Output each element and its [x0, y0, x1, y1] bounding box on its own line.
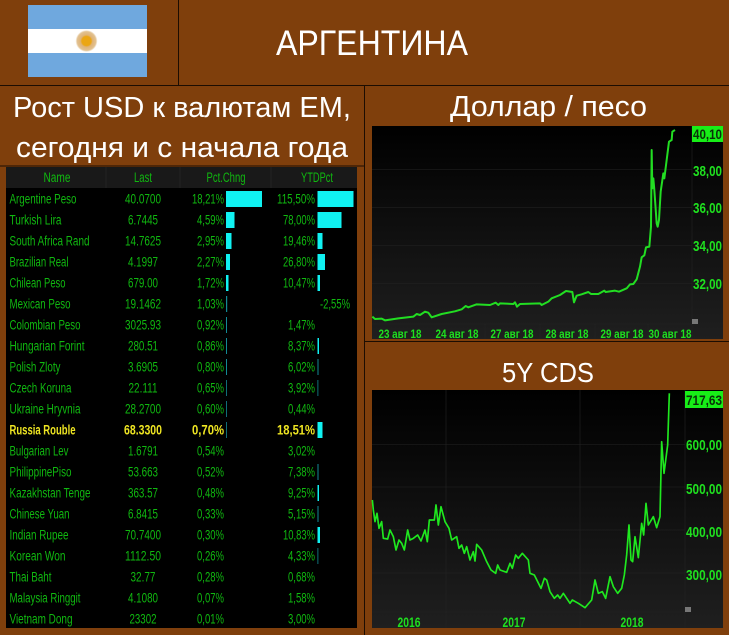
- heading: 5Y CDS: 5Y CDS: [502, 357, 594, 388]
- column: Name: Argentine Peso: [10, 192, 76, 206]
- heading: EM currencies: [13, 92, 351, 164]
- column: Name: Chilean Peso: [10, 276, 66, 290]
- chart: dollar / peso line chart: [372, 126, 723, 341]
- column: Name: Russia Rouble: [10, 422, 76, 438]
- column: Last: 4.1997: [128, 254, 158, 270]
- heading: dollar / peso: Доллар / песо: [450, 91, 647, 123]
- column: YTDPct values: 18,51%: [277, 422, 315, 438]
- column: YTDPct values: 115,50%: [277, 192, 315, 206]
- price tag: 40,10: 40,10: [693, 126, 722, 142]
- column: Pct.Chng values: 0,70%: [192, 422, 224, 438]
- column: YTDPct values: 78,00%: [283, 212, 315, 228]
- chart: 5Y CDS line chart: [372, 390, 723, 630]
- column: YTDPct values: 3,02%: [288, 444, 315, 458]
- heading: EM currencies: Рост USD к валютам EM,: [13, 92, 351, 124]
- column: YTDPct values: 10,47%: [283, 276, 315, 290]
- table header: Pct.Chng: [206, 170, 246, 185]
- axis: year labels: 2016: [398, 615, 421, 630]
- axis: price labels: [693, 163, 722, 293]
- column: Last: 28.2700: [125, 402, 161, 416]
- axis: year labels: 2017: [502, 615, 526, 630]
- column: Last: 3025.93: [125, 318, 161, 332]
- column: Name: Bulgarian Lev: [10, 444, 69, 458]
- column: Name: Polish Zloty: [10, 360, 61, 374]
- column: YTDPct values: 3,00%: [288, 612, 315, 626]
- column: Last: 1.6791: [128, 444, 158, 458]
- axis: year labels: 2018: [620, 615, 644, 630]
- axis: year labels: [398, 615, 644, 630]
- column: Last: 6.7445: [128, 212, 158, 228]
- column: YTDPct values: 8,37%: [288, 338, 315, 354]
- column: Last: 53.663: [128, 464, 158, 480]
- axis: date labels: 27 авг 18: [490, 327, 534, 341]
- panel: currency table: [6, 167, 357, 628]
- column: Pct.Chng values: 1,03%: [197, 296, 224, 312]
- column: Pct.Chng values: 1,72%: [197, 276, 224, 290]
- axis: date labels: 29 авг 18: [600, 327, 644, 341]
- column: Pct.Chng values: 0,52%: [197, 464, 224, 480]
- column: Pct.Chng values: 0,86%: [197, 338, 224, 354]
- price tag: 717,63: 717,63: [686, 392, 722, 408]
- column: Last: 280.51: [128, 338, 158, 354]
- column: Pct.Chng values: 0,01%: [197, 612, 224, 626]
- column: YTDPct values: 9,25%: [288, 486, 315, 500]
- column: Last: 14.7625: [125, 234, 161, 248]
- bars: Pct.Chng: [226, 191, 262, 438]
- column: YTDPct values: 5,15%: [288, 506, 315, 522]
- icon: axis scale box: [685, 607, 691, 612]
- column: YTDPct values: 10,83%: [283, 528, 315, 542]
- column: YTDPct values: 1,47%: [288, 318, 315, 332]
- column: Last: 32.77: [130, 570, 156, 584]
- column: Name: South Africa Rand: [10, 234, 90, 248]
- column: Last: 23302: [130, 612, 156, 626]
- column: Pct.Chng values: 0,33%: [197, 506, 224, 522]
- column: Name: Colombian Peso: [10, 318, 80, 332]
- column: Name: Korean Won: [10, 548, 66, 564]
- column: Pct.Chng values: 0,28%: [197, 570, 224, 584]
- column: Last: 68.3300: [124, 422, 162, 438]
- column: Pct.Chng values: 4,59%: [197, 212, 224, 228]
- column: Last: 19.1462: [125, 296, 161, 312]
- column: YTDPct values: 26,80%: [283, 254, 315, 270]
- column: Pct.Chng values: 0,48%: [197, 486, 224, 500]
- column: Last: 1112.50: [125, 548, 161, 564]
- column: Last: 4.1080: [128, 590, 158, 606]
- column: Name: Hungarian Forint: [10, 338, 85, 354]
- column: Name: [10, 192, 90, 626]
- table header: Name: [44, 170, 70, 185]
- column: YTDPct values: 3,92%: [288, 380, 315, 396]
- column: YTDPct values: 6,02%: [288, 360, 315, 374]
- heading: EM currencies: сегодня и с начала года: [16, 132, 349, 164]
- title: АРГЕНТИНА: [276, 24, 469, 63]
- column: Last: [124, 192, 162, 626]
- column: Name: Brazilian Real: [10, 254, 68, 270]
- column: Pct.Chng values: 0,26%: [197, 548, 224, 564]
- column: Pct.Chng values: 0,80%: [197, 360, 224, 374]
- axis: date labels: [378, 327, 692, 341]
- axis: date labels: 23 авг 18: [378, 327, 422, 341]
- column: YTDPct values: 0,44%: [288, 402, 315, 416]
- table header: [6, 167, 357, 188]
- axis: date labels: 30 авг 18: [648, 327, 692, 341]
- column: Last: 22.111: [128, 380, 158, 396]
- icon: axis scale box: [692, 319, 698, 324]
- column: Name: Turkish Lira: [10, 212, 62, 228]
- column: YTDPct values: -2,55%: [320, 296, 350, 312]
- column: Name: Mexican Peso: [10, 296, 70, 312]
- table header: YTDPct: [301, 170, 333, 185]
- column: Pct.Chng values: 18,21%: [192, 192, 224, 206]
- column: Pct.Chng values: 0,30%: [197, 528, 224, 542]
- icon: Argentina flag: [28, 5, 147, 77]
- column: Pct.Chng values: 0,65%: [197, 380, 224, 396]
- column: Name: PhilippinePiso: [10, 464, 72, 480]
- axis: CDS labels: [686, 437, 722, 584]
- column: Pct.Chng values: 2,95%: [197, 234, 224, 248]
- column: Last: 40.0700: [125, 192, 161, 206]
- column: Name: Chinese Yuan: [10, 506, 70, 522]
- column: Last: 70.7400: [125, 528, 161, 542]
- column: YTDPct values: 19,46%: [283, 234, 315, 248]
- column: Name: Vietnam Dong: [10, 612, 72, 626]
- column: YTDPct values: 4,33%: [288, 548, 315, 564]
- line: CDS: [372, 393, 669, 608]
- column: Name: Thai Baht: [10, 570, 52, 584]
- column: YTDPct values: 1,58%: [288, 590, 315, 606]
- column: Name: Malaysia Ringgit: [10, 590, 81, 606]
- line: USD/ARS: [372, 130, 675, 320]
- column: Pct.Chng values: 0,07%: [197, 590, 224, 606]
- column: Name: Indian Rupee: [10, 528, 68, 542]
- axis: date labels: 28 авг 18: [546, 327, 589, 341]
- column: Last: 3.6905: [128, 360, 158, 374]
- column: Name: Kazakhstan Tenge: [10, 486, 90, 500]
- table header: Last: [134, 170, 152, 185]
- column: Pct.Chng values: [192, 192, 224, 626]
- column: Last: 679.00: [128, 276, 158, 290]
- column: Pct.Chng values: 0,92%: [197, 318, 224, 332]
- column: YTDPct values: 0,68%: [288, 570, 315, 584]
- column: Last: 6.8415: [128, 506, 158, 522]
- bars: YTDPct: [318, 191, 354, 564]
- column: YTDPct values: [277, 192, 350, 626]
- column: Last: 363.57: [128, 486, 158, 500]
- axis: date labels: 24 авг 18: [436, 327, 479, 341]
- column: Name: Czech Koruna: [10, 380, 72, 396]
- column: Pct.Chng values: 0,60%: [197, 402, 224, 416]
- column: Pct.Chng values: 2,27%: [197, 254, 224, 270]
- column: Pct.Chng values: 0,54%: [197, 444, 224, 458]
- column: YTDPct values: 7,38%: [288, 464, 315, 480]
- column: Name: Ukraine Hryvnia: [10, 402, 81, 416]
